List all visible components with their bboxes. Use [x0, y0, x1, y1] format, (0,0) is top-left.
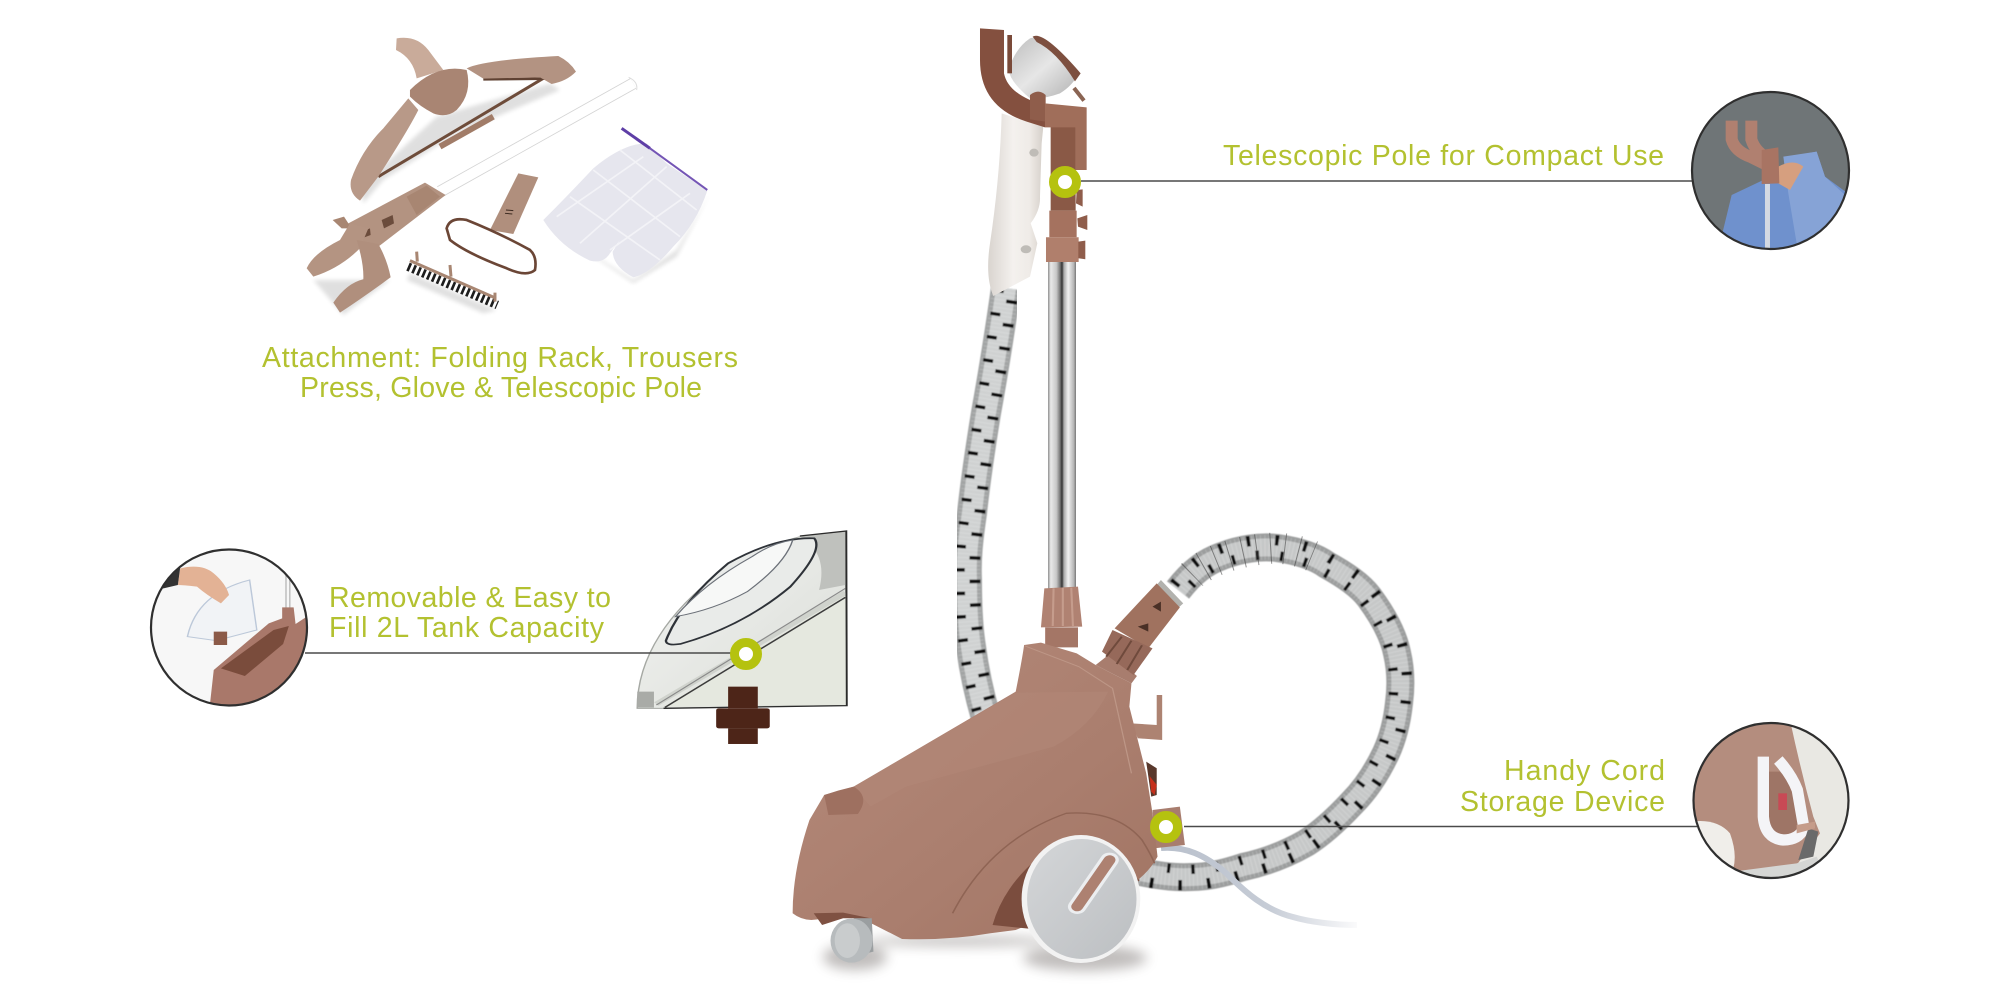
tank valve plug: [716, 687, 770, 744]
steamer body: [793, 580, 1185, 963]
arch shade: [993, 838, 1140, 933]
glove: [543, 128, 707, 277]
hose: right: [1130, 540, 1407, 885]
water tank: [637, 531, 847, 744]
inset circle outline: pole: [1692, 92, 1849, 249]
trousers press: [447, 173, 538, 273]
cord: [1161, 848, 1357, 925]
heading: attachments caption: Press, Glove & Telescopic Pole: [300, 372, 702, 404]
tank top shading: [800, 532, 845, 590]
marker: cord storage: [1154, 816, 1178, 838]
inset circle outline: cord storage: [1694, 723, 1848, 878]
hose: left: [960, 286, 1014, 719]
steamer head and handle: [980, 28, 1087, 296]
tank diagonal band: [656, 593, 845, 704]
cord clip: [1152, 807, 1185, 848]
tank right edge: [664, 531, 847, 708]
tray recess: [824, 787, 863, 815]
callout text: telescopic pole: Telescopic Pole for Compact Use: [1223, 140, 1664, 172]
garment hook: [980, 28, 1045, 127]
side hook: [1131, 695, 1162, 740]
inset circle: pole and shirt: [1693, 93, 1848, 248]
main housing: [793, 643, 1158, 939]
shadow: base: [823, 936, 1147, 971]
inset circle: filling tank: [162, 566, 306, 704]
power switch: [1146, 762, 1157, 797]
folding rack hanger: [351, 38, 576, 201]
large wheel: [1022, 835, 1140, 963]
heading: attachments caption: Attachment: Folding Rack, Trousers: [262, 342, 738, 374]
inset circle: cord storage: [1694, 724, 1848, 877]
hook crossbar and neck: [1051, 127, 1076, 211]
callout text: tank: [329, 582, 611, 644]
marker: telescopic pole: [1054, 170, 1076, 194]
callout text: tank: Removable & Easy to: [329, 582, 611, 614]
body top edge: [1025, 646, 1131, 773]
steam head: [1009, 38, 1078, 98]
body facet: [854, 692, 1108, 807]
line: telescopic callout: [1081, 180, 1693, 182]
hose connector: [1152, 580, 1183, 608]
inset circle outline: tank: [151, 550, 307, 706]
tank shell: [637, 532, 847, 708]
tank lid ring: [666, 538, 816, 645]
handle: [988, 113, 1043, 296]
heading: attachments caption: [262, 342, 738, 404]
callout text: cord storage: Handy Cord: [1504, 755, 1665, 787]
wheel arch: [953, 813, 1155, 913]
callout text: cord storage: Storage Device: [1460, 786, 1665, 818]
collars: [1049, 211, 1077, 237]
underside: [814, 913, 870, 925]
front caster: [854, 918, 873, 955]
callout text: tank: Fill 2L Tank Capacity: [329, 612, 605, 644]
telescopic pole: [307, 77, 637, 313]
telescopic steel pole: [1048, 258, 1076, 590]
line: cord callout: [1184, 826, 1697, 828]
hose coil wires: [1192, 548, 1312, 575]
marker: tank: [734, 642, 758, 666]
pole collar: [1041, 587, 1082, 627]
panel: attachments photo: [307, 38, 710, 315]
line: tank callout: [305, 652, 734, 654]
brush comb: [408, 252, 497, 305]
shadow under attachments: [313, 83, 710, 315]
callout text: cord storage: [1460, 755, 1665, 818]
tank lower section: [664, 595, 847, 707]
